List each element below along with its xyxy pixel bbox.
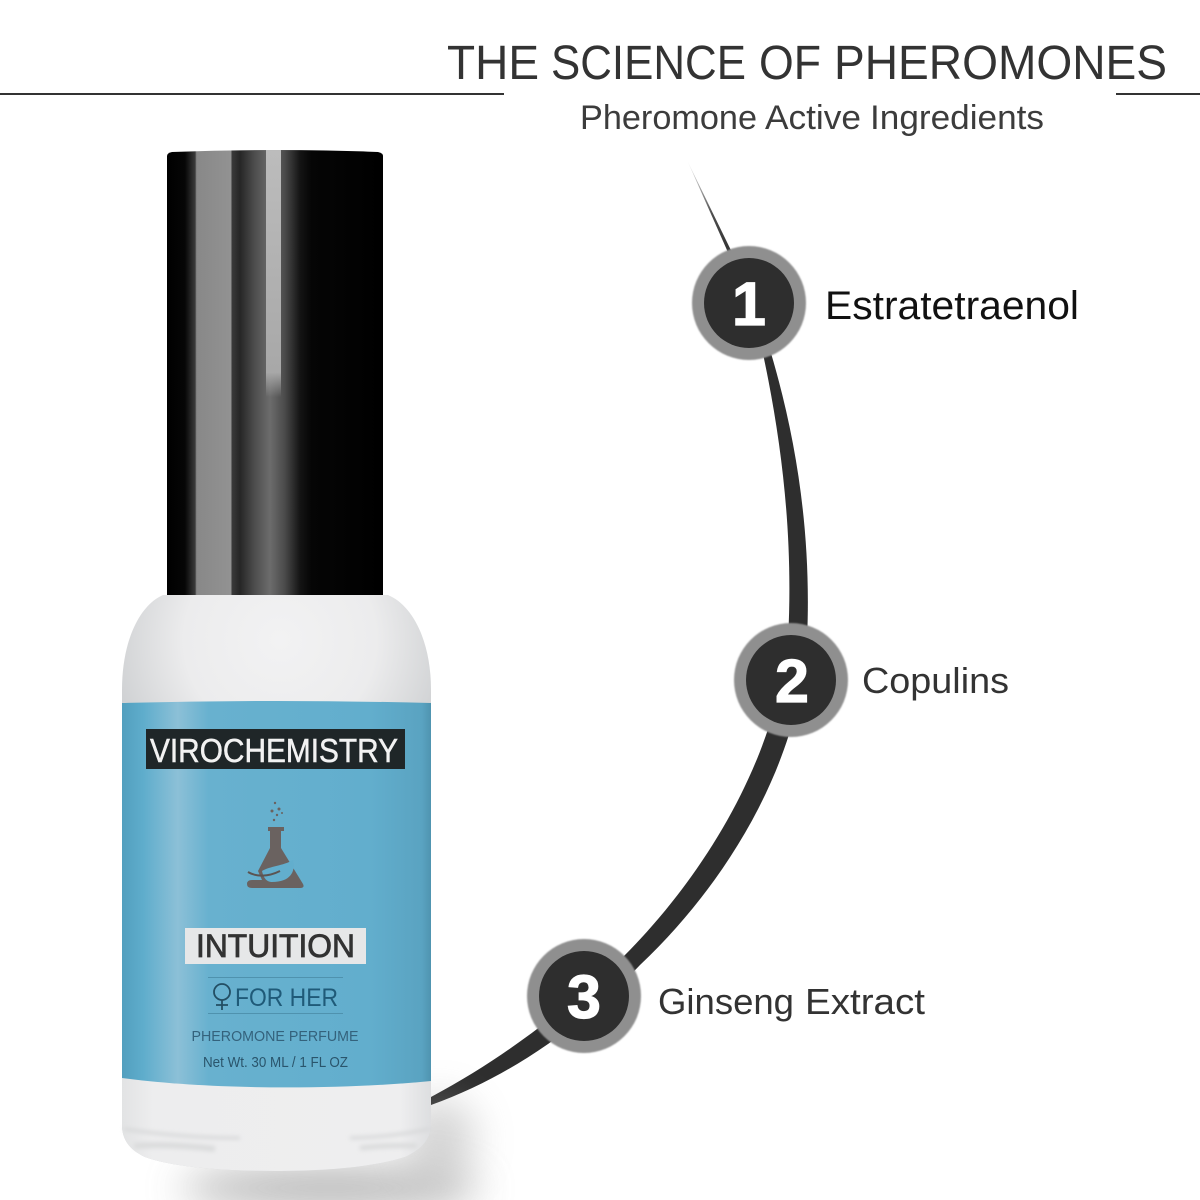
- glass base ridge: [124, 1129, 430, 1149]
- product type: PHEROMONE PERFUME: [192, 1028, 358, 1045]
- title: PHEROMONES: [834, 36, 1167, 90]
- title: OF: [759, 36, 821, 90]
- subtitle: Active: [765, 99, 861, 137]
- bottle lower section: [122, 1070, 431, 1171]
- label: [122, 701, 431, 1087]
- subtitle: Ingredients: [870, 99, 1044, 137]
- bottle body: [122, 595, 431, 1171]
- step 1 marker: 1: [732, 270, 766, 338]
- title: [447, 36, 1167, 90]
- step 3 marker: [527, 939, 641, 1053]
- step 2 marker: 2: [775, 647, 809, 715]
- step 3 marker: 3: [567, 963, 601, 1031]
- subtitle: Pheromone: [580, 99, 757, 137]
- bottle shadow: [180, 1098, 480, 1200]
- title: THE: [447, 36, 539, 90]
- step 1 label: Estratetraenol: [825, 284, 1079, 328]
- step 3 label: Extract: [805, 981, 925, 1022]
- step 2 marker: [734, 623, 848, 737]
- icon: female symbol: [214, 984, 230, 1010]
- icon: flask with leaf: [247, 802, 304, 888]
- for her block: [208, 977, 343, 1014]
- step 1 marker: [692, 246, 806, 360]
- right header rule: [1116, 93, 1200, 95]
- perfume bottle: [122, 150, 431, 1171]
- product name tag: INTUITION: [196, 928, 355, 964]
- step 2 label: Copulins: [862, 660, 1009, 701]
- timeline curve: [431, 160, 808, 1105]
- left header rule: [0, 93, 504, 95]
- cap: [167, 150, 383, 595]
- title: SCIENCE: [551, 36, 746, 90]
- step 3 label: [658, 981, 925, 1022]
- for her block: FOR HER: [235, 984, 338, 1012]
- cap highlight: [266, 150, 281, 397]
- net weight: Net Wt. 30 ML / 1 FL OZ: [203, 1055, 348, 1071]
- subtitle: [580, 99, 1044, 137]
- brand bar: VIROCHEMISTRY: [150, 732, 398, 769]
- step 3 label: Ginseng: [658, 981, 794, 1022]
